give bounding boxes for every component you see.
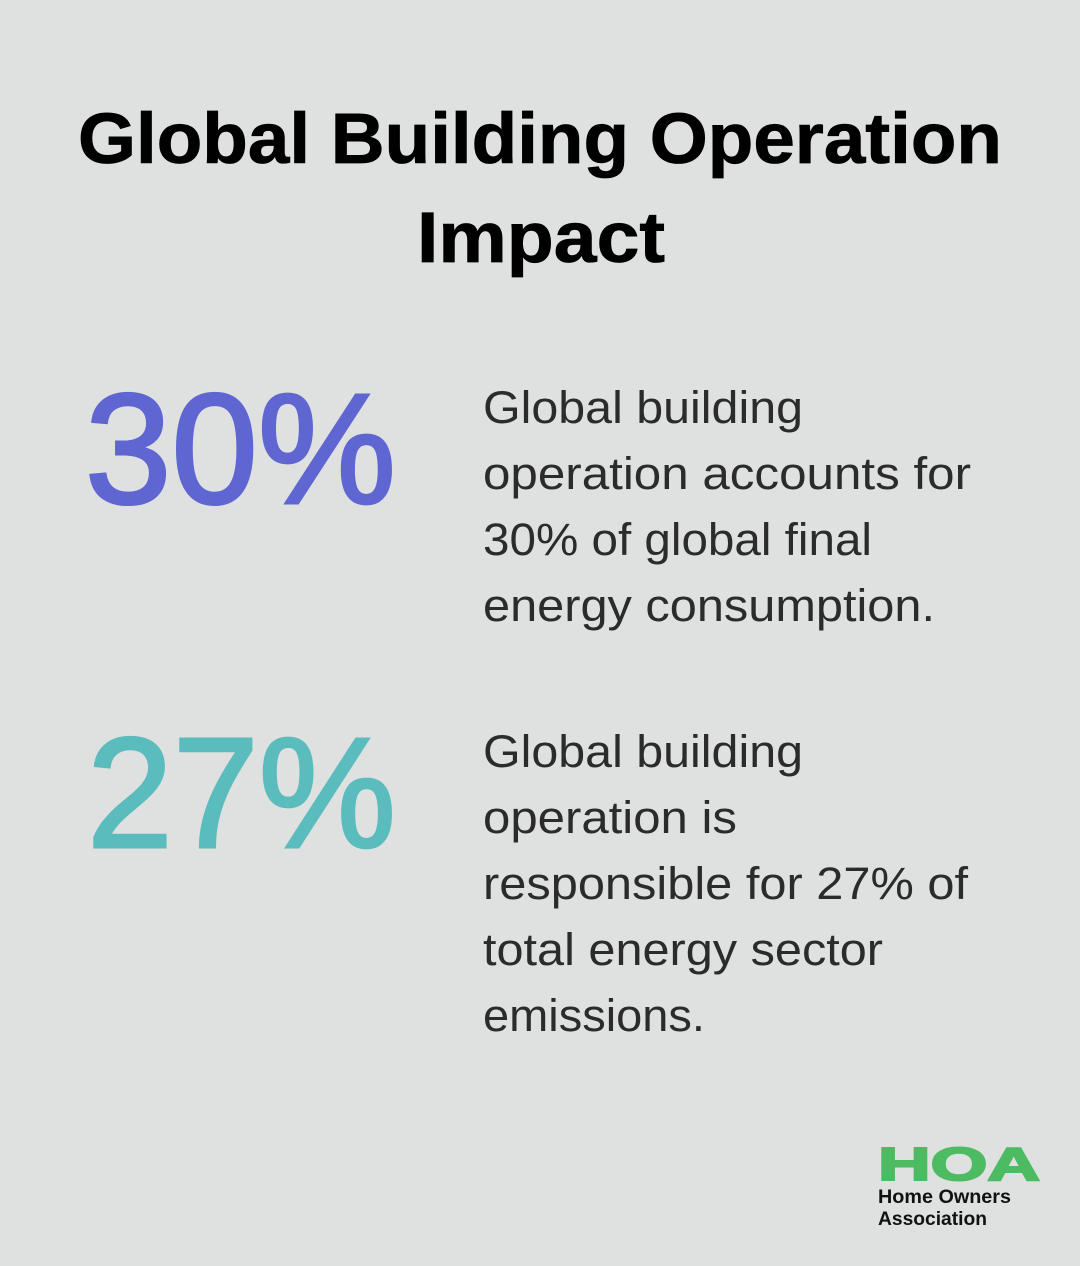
statistic: 27%: 27% [87,706,396,881]
title: Global Building Operation [78,100,1002,179]
text block: emissions: responsible for 27% of [483,858,969,909]
text block: emissions: emissions. [483,990,705,1041]
logo: Home Owners Association: Home Owners [878,1187,1011,1208]
text block: energy consumption [483,382,971,631]
title [78,100,1002,278]
logo: Home Owners Association: HOA [878,1138,1040,1190]
text block: energy consumption: Global building [483,382,803,433]
text block: emissions [483,726,969,1041]
statistic: 30%: 30% [85,362,396,537]
logo: Home Owners Association: Association [878,1209,987,1230]
text block: energy consumption: energy consumption. [483,580,935,631]
text block: emissions: operation is [483,792,737,843]
text block: emissions: total energy sector [483,924,883,975]
text block: energy consumption: operation accounts for [483,448,971,499]
title: Impact [417,199,665,278]
logo: Home Owners Association [878,1138,1040,1230]
text block: energy consumption: 30% of global final [483,514,872,565]
text block: emissions: Global building [483,726,803,777]
